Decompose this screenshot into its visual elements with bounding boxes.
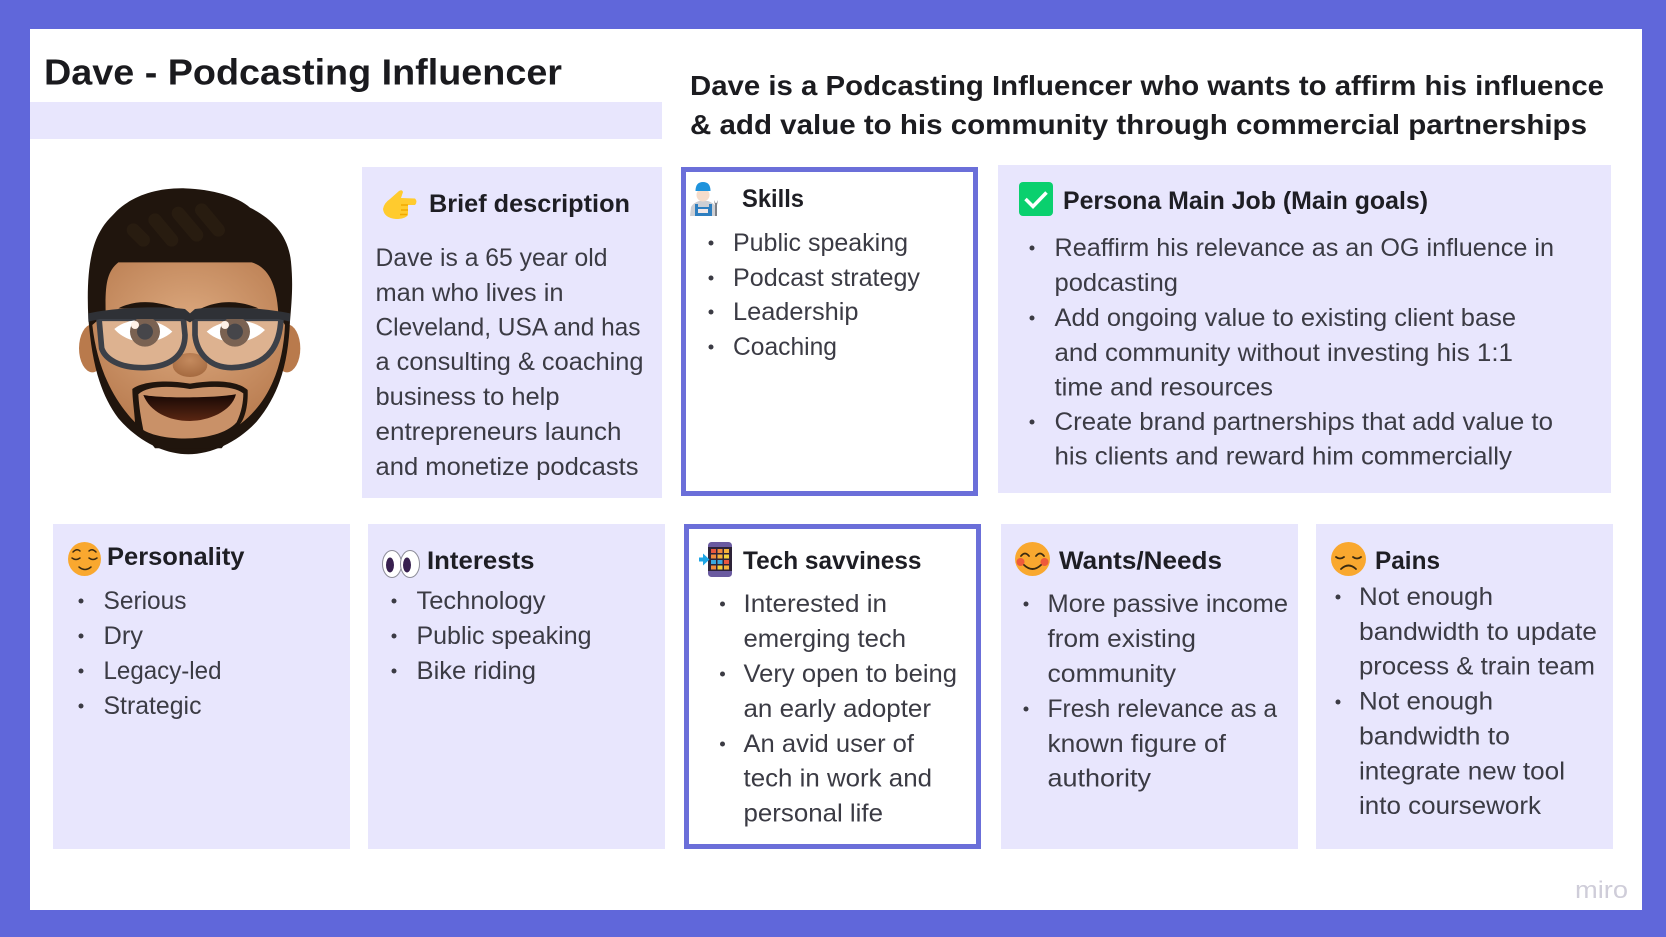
interests list: Bike riding xyxy=(416,657,536,685)
panel: brief description xyxy=(362,167,662,498)
goals list: Create brand partnerships that add value to xyxy=(1054,408,1553,436)
persona summary xyxy=(690,70,1604,140)
description text: and monetize podcasts xyxy=(376,453,638,481)
personality list: Serious xyxy=(104,587,186,615)
tech list xyxy=(720,590,957,828)
panel: main goals xyxy=(998,165,1611,493)
skills list xyxy=(708,229,920,361)
wants list: authority xyxy=(1048,764,1152,792)
interests list xyxy=(392,587,592,685)
panel: pains xyxy=(1316,524,1613,849)
wants list: Fresh relevance as a xyxy=(1048,695,1277,723)
panel: wants and needs xyxy=(1001,524,1298,849)
personality list xyxy=(78,587,222,720)
heading: main goals: Persona Main Job (Main goals) xyxy=(1063,187,1428,215)
pains list: bandwidth to update xyxy=(1359,618,1597,646)
description text: Cleveland, USA and has xyxy=(376,314,640,342)
heading: wants and needs: Wants/Needs xyxy=(1059,547,1222,575)
icon: green check xyxy=(1019,182,1053,216)
icon: sad face xyxy=(1331,542,1366,576)
persona summary: & add value to his community through commercial partnerships xyxy=(690,109,1587,140)
heading: brief description: Brief description xyxy=(429,190,630,218)
tech list: tech in work and xyxy=(744,764,932,792)
icon: smiling face xyxy=(1015,542,1050,576)
icon: mechanic xyxy=(690,182,718,216)
pains list: process & train team xyxy=(1359,652,1595,680)
tech list: Interested in xyxy=(744,590,887,618)
pains list: Not enough xyxy=(1359,688,1493,716)
description text xyxy=(376,244,644,481)
pains list: Not enough xyxy=(1359,583,1493,611)
icon: relieved face xyxy=(68,542,101,576)
goals list xyxy=(1030,234,1554,470)
wants list: community xyxy=(1048,660,1177,688)
tech list: an early adopter xyxy=(744,695,931,723)
skills list: Podcast strategy xyxy=(733,264,920,292)
skills list: Public speaking xyxy=(733,229,908,257)
persona summary: Dave is a Podcasting Influencer who wants to affirm his influence xyxy=(690,70,1604,101)
heading: personality: Personality xyxy=(107,543,245,571)
personality list: Legacy-led xyxy=(104,657,222,685)
description text: Dave is a 65 year old xyxy=(376,244,608,272)
wants list: known figure of xyxy=(1048,730,1226,758)
goals list: and community without investing his 1:1 xyxy=(1054,339,1513,367)
heading: pains: Pains xyxy=(1375,547,1440,575)
tech list: emerging tech xyxy=(744,625,906,653)
wants list: from existing xyxy=(1048,625,1196,653)
title band xyxy=(30,102,662,139)
heading: skills: Skills xyxy=(742,185,804,213)
description text: a consulting & coaching xyxy=(376,348,644,376)
icon: pointing hand xyxy=(383,190,416,219)
skills list: Leadership xyxy=(733,298,858,326)
icon: eyes xyxy=(382,550,420,578)
title: Dave - Podcasting Influencer xyxy=(44,52,562,92)
watermark: miro: miro xyxy=(1575,877,1628,904)
tech list: personal life xyxy=(744,800,883,828)
goals list: Add ongoing value to existing client base xyxy=(1054,304,1516,332)
wants list: More passive income xyxy=(1048,590,1288,618)
description text: man who lives in xyxy=(376,279,564,307)
pains list: bandwidth to xyxy=(1359,722,1510,750)
panel: personality xyxy=(53,524,350,849)
interests list: Public speaking xyxy=(416,622,592,650)
heading: interests: Interests xyxy=(427,547,534,575)
tech list: An avid user of xyxy=(744,730,914,758)
personality list: Strategic xyxy=(104,692,202,720)
personality list: Dry xyxy=(104,622,143,650)
description text: entrepreneurs launch xyxy=(376,418,622,446)
description text: business to help xyxy=(376,383,560,411)
panel: interests xyxy=(368,524,665,849)
pains list: into coursework xyxy=(1359,792,1542,820)
wants list xyxy=(1024,590,1288,792)
icon: tablet with arrow xyxy=(699,542,732,577)
heading: tech savviness: Tech savviness xyxy=(743,547,922,575)
interests list: Technology xyxy=(416,587,546,615)
pains list xyxy=(1336,583,1597,820)
goals list: Reaffirm his relevance as an OG influence in xyxy=(1054,234,1554,262)
goals list: time and resources xyxy=(1054,374,1273,402)
panel: skills xyxy=(684,170,976,494)
panel: tech savviness xyxy=(686,526,978,846)
tech list: Very open to being xyxy=(744,660,957,688)
goals list: podcasting xyxy=(1054,269,1178,297)
goals list: his clients and reward him commercially xyxy=(1054,442,1513,470)
skills list: Coaching xyxy=(733,333,837,361)
pains list: integrate new tool xyxy=(1359,758,1565,786)
avatar: Dave xyxy=(79,188,300,454)
